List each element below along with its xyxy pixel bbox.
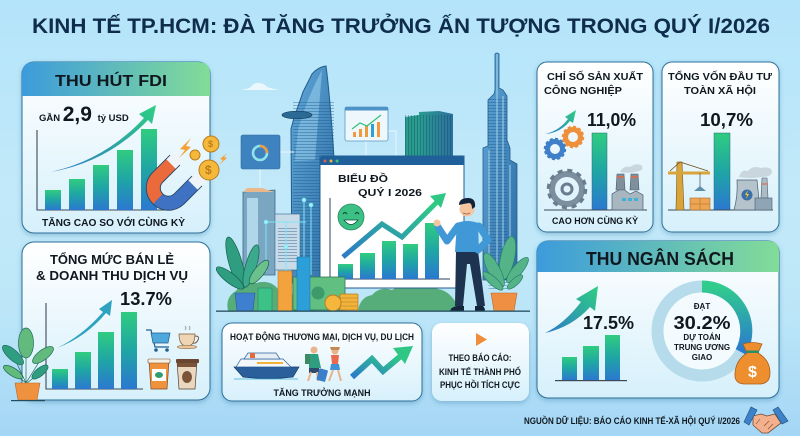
note line three: PHỤC HỒI TÍCH CỰC	[440, 379, 520, 390]
investment heading line two: TOÀN XÃ HỘI	[684, 84, 756, 97]
title: KINH TẾ TP.HCM: ĐÀ TĂNG TRƯỞNG ẤN TƯỢNG TRONG QUÝ I/2026	[32, 14, 770, 38]
icon: takeaway cup orange	[148, 359, 170, 389]
cloud	[240, 83, 279, 90]
budget value: 17.5%	[583, 313, 634, 333]
donut chart	[658, 286, 746, 376]
FDI caption: TĂNG CAO SO VỚI CÙNG KỲ	[42, 216, 185, 229]
retail bar chart	[46, 303, 143, 389]
icon: coins and sparks	[179, 136, 227, 180]
presenter figure	[434, 198, 488, 311]
investment heading: TỔNG VỐN ĐẦU TƯ	[668, 69, 772, 83]
glowing network lines	[264, 198, 313, 275]
central city illustration	[214, 53, 532, 312]
note line two: KINH TẾ THÀNH PHỐ	[439, 366, 521, 377]
icon: crane and crates	[668, 162, 710, 210]
investment bar	[714, 133, 730, 210]
board heading: BIỂU ĐỒ	[338, 172, 388, 185]
icon: takeaway cup brown	[176, 359, 199, 389]
icon: coins and sparks: $	[205, 163, 212, 177]
left office buildings	[243, 188, 300, 275]
commerce heading: HOẠT ĐỘNG THƯƠNG MẠI, DỊCH VỤ, DU LỊCH	[230, 331, 414, 343]
industry heading line two: CÔNG NGHIỆP	[544, 84, 622, 97]
panel: FDI	[22, 62, 227, 233]
icon: cruise ship	[234, 353, 299, 379]
panel: total social investment	[662, 62, 779, 232]
smiley icon	[338, 204, 364, 230]
FDI header band	[22, 62, 210, 96]
right potted plant	[480, 235, 532, 311]
presentation board	[320, 156, 464, 288]
icon: money bag: $	[748, 364, 757, 381]
ground line	[216, 310, 530, 312]
mini dashboard card: donut	[241, 135, 294, 187]
source note: NGUỒN DỮ LIỆU: BÁO CÁO KINH TẾ-XÃ HỘI QUÝ I/2026	[524, 415, 740, 427]
commerce caption: TĂNG TRƯỞNG MẠNH	[274, 387, 371, 399]
icon: coffee cup	[177, 326, 199, 349]
panel: retail	[0, 242, 210, 401]
industry heading: CHỈ SỐ SẢN XUẤT	[547, 69, 644, 83]
icon: travelers	[305, 346, 341, 382]
industry bar	[592, 133, 607, 210]
coins	[325, 294, 358, 311]
industry caption: CAO HƠN CÙNG KỲ	[552, 215, 638, 226]
Bitexco tower	[282, 66, 334, 283]
budget bar chart	[555, 335, 627, 381]
Landmark 81 tower	[483, 53, 517, 290]
note line one: THEO BÁO CÁO:	[448, 353, 512, 363]
icon: gears	[545, 127, 586, 208]
FDI value: GẦN 2,9 tỷ USD	[39, 103, 129, 126]
icon: play triangle	[476, 333, 487, 346]
retail value: 13.7%	[120, 289, 172, 309]
commerce trend arrow	[352, 346, 413, 377]
board bar chart	[330, 198, 450, 279]
icon: magnet	[153, 156, 201, 203]
panel: budget revenue	[537, 241, 779, 398]
icon: coins and sparks: $	[208, 139, 213, 149]
panel: commerce and tourism	[222, 323, 422, 401]
FDI heading: THU HÚT FDI	[55, 72, 167, 90]
green shrubs	[227, 282, 460, 311]
FDI bar chart	[37, 129, 170, 210]
budget heading: THU NGÂN SÁCH	[586, 248, 734, 269]
retail trend arrow	[57, 300, 112, 348]
industry value: 11,0%	[587, 110, 636, 130]
FDI trend arrow	[51, 105, 156, 172]
mini dashboard card: chart	[345, 107, 396, 156]
banknote	[293, 277, 345, 310]
panel: industrial production	[537, 62, 653, 232]
donut caption: TRUNG ƯƠNG	[674, 343, 730, 352]
board trend arrow	[343, 193, 446, 257]
icon: orange potted plant	[0, 328, 56, 401]
donut value: 30.2%	[674, 313, 730, 333]
donut caption: DỰ TOÁN	[683, 333, 721, 342]
icon: shopping cart	[146, 330, 170, 352]
budget arrow	[545, 286, 598, 333]
industry arrow	[545, 110, 576, 134]
teal building	[405, 111, 453, 157]
investment value: 10,7%	[700, 110, 753, 130]
retail heading: TỔNG MỨC BÁN LẺ	[50, 252, 174, 267]
icon: power plant	[734, 167, 772, 210]
left potted plant	[214, 235, 272, 311]
donut caption: GIAO	[692, 353, 712, 362]
icon: factory	[612, 164, 643, 210]
icon: money bag	[735, 342, 770, 384]
icon: handshake	[744, 407, 788, 433]
donut label: dat: ĐẠT	[694, 302, 710, 311]
front colored bars	[258, 257, 310, 311]
retail heading line two: & DOANH THU DỊCH VỤ	[36, 269, 188, 283]
panel: report note	[432, 323, 529, 401]
budget header band	[537, 241, 779, 272]
board subheading: QUÝ I 2026	[358, 186, 422, 199]
